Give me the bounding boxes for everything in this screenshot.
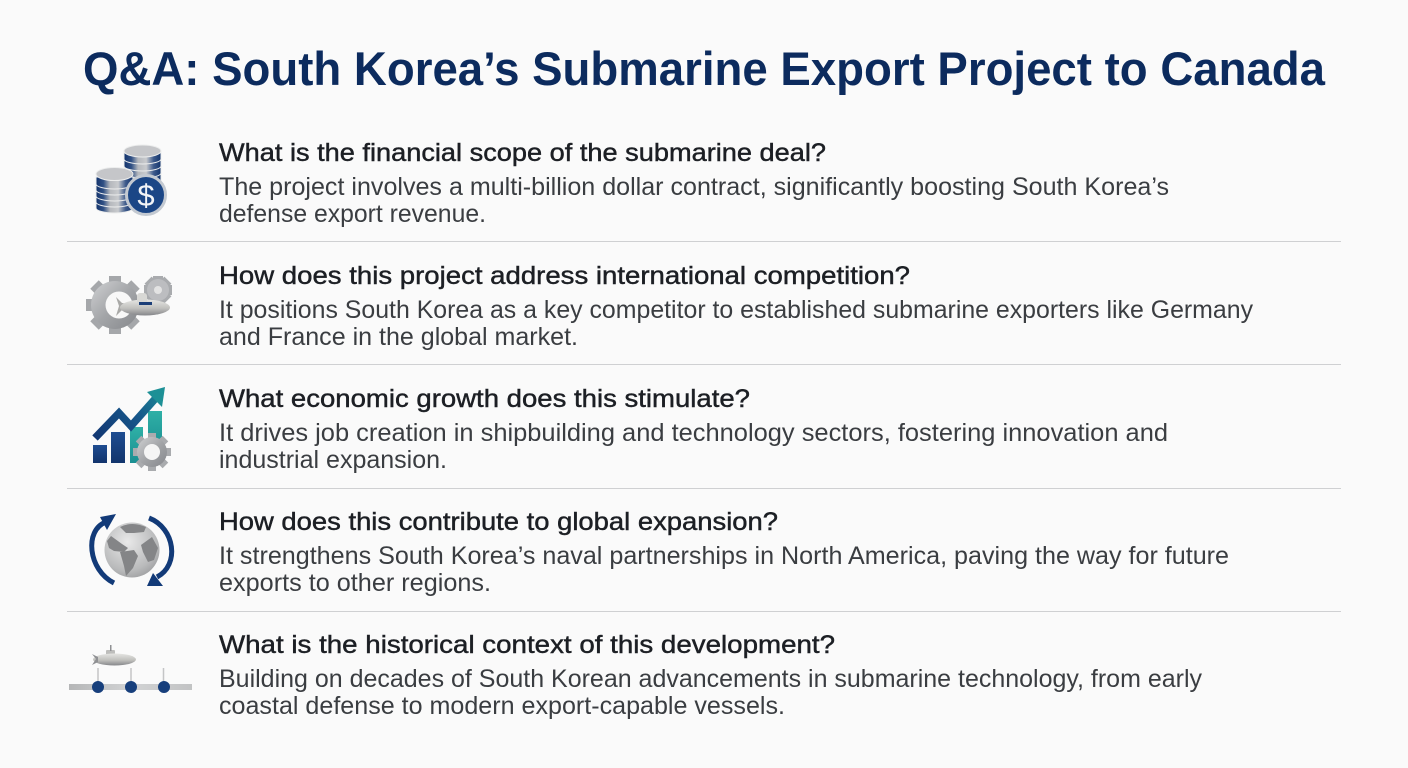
- icon: globe with circular arrows: [92, 514, 172, 586]
- answer 4: [219, 542, 1229, 597]
- panel: international competition: [86, 262, 1253, 351]
- answer 1: The project involves a multi-billion dollar contract, significantly boosting South Korea’s: [219, 173, 1169, 201]
- question 5: What is the historical context of this development?: [219, 631, 835, 659]
- answer 5: [219, 665, 1202, 720]
- answer 4: exports to other regions.: [219, 569, 491, 597]
- question 1: What is the financial scope of the submarine deal?: [219, 139, 826, 167]
- question 3: What economic growth does this stimulate?: [219, 385, 750, 413]
- title: Q&A: South Korea’s Submarine Export Project to Canada: [83, 42, 1326, 95]
- answer 3: It drives job creation in shipbuilding and technology sectors, fostering innovation and: [219, 419, 1168, 447]
- icon: submarine timeline: [69, 645, 192, 693]
- question 4: How does this contribute to global expansion?: [219, 508, 778, 536]
- icon: coin stacks with dollar: $: [137, 178, 155, 213]
- answer 2: [219, 296, 1253, 351]
- answer 5: coastal defense to modern export-capable vessels.: [219, 692, 785, 720]
- answer 1: [219, 173, 1169, 228]
- answer 3: industrial expansion.: [219, 446, 447, 474]
- icon: growth chart with gear: [93, 387, 171, 471]
- panel: historical context: [69, 631, 1202, 720]
- icon: gears with submarine: [86, 276, 172, 334]
- answer 3: [219, 419, 1168, 474]
- answer 5: Building on decades of South Korean advancements in submarine technology, from early: [219, 665, 1202, 693]
- answer 2: It positions South Korea as a key competitor to established submarine exporters like Germany: [219, 296, 1253, 324]
- answer 2: and France in the global market.: [219, 323, 578, 351]
- panel: economic growth: [93, 385, 1168, 474]
- answer 1: defense export revenue.: [219, 200, 486, 228]
- answer 4: It strengthens South Korea’s naval partnerships in North America, paving the way for future: [219, 542, 1229, 570]
- panel: financial scope: [96, 139, 1169, 228]
- panel: global expansion: [92, 508, 1229, 597]
- question 2: How does this project address international competition?: [219, 262, 910, 290]
- icon: coin stacks with dollar: [96, 145, 166, 214]
